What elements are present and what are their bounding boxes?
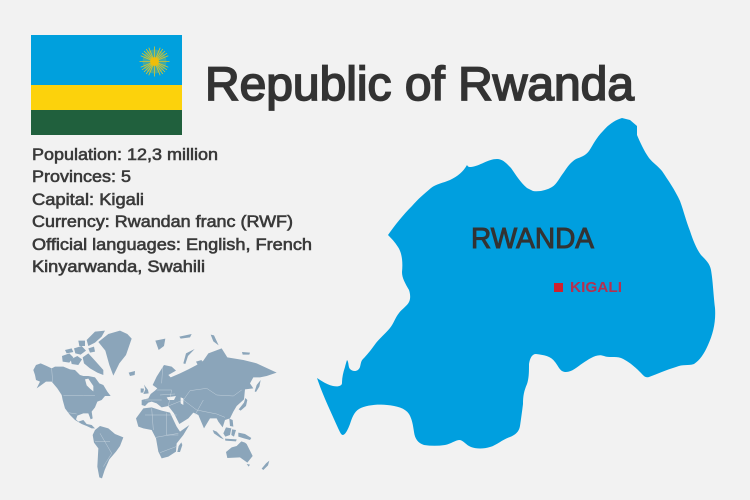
Madagascar: [177, 442, 182, 452]
world map: [33, 331, 277, 478]
text block: country facts: Currency: Rwandan franc (RWF): [32, 213, 293, 231]
capital marker: Kigali: KIGALI: [570, 280, 622, 296]
title: Republic of Rwanda: [205, 57, 635, 110]
Africa: [136, 407, 189, 458]
Southeast Asia islands: [213, 419, 251, 441]
label: RWANDA: RWANDA: [471, 223, 595, 255]
United Kingdom and Ireland: [141, 385, 149, 394]
Arctic Eurasia islands: [155, 334, 250, 366]
Australia: [226, 441, 253, 463]
country borders: [52, 367, 242, 467]
text block: country facts: Provinces: 5: [32, 168, 131, 186]
map of Rwanda: [317, 118, 715, 448]
text block: country facts: Kinyarwanda, Swahili: [32, 258, 205, 276]
Hudson Bay: [85, 379, 93, 391]
text block: country facts: Population: 12,3 million: [32, 146, 218, 164]
South America: [93, 426, 123, 478]
Eurasia: [142, 348, 277, 428]
text block: country facts: [32, 146, 312, 276]
flag of Rwanda: [31, 35, 182, 135]
Black Sea and Caspian Sea: [167, 396, 183, 405]
New Zealand and Tasmania: [247, 461, 269, 470]
Iceland: [129, 371, 135, 376]
Japan and Sakhalin: [239, 380, 261, 411]
Arctic islands: [62, 331, 105, 375]
North America: [33, 363, 111, 428]
icon: flag sun: [140, 46, 170, 76]
text block: country facts: Capital: Kigali: [32, 191, 144, 209]
Greenland: [98, 331, 132, 376]
text block: country facts: Official languages: English, French: [32, 236, 312, 254]
